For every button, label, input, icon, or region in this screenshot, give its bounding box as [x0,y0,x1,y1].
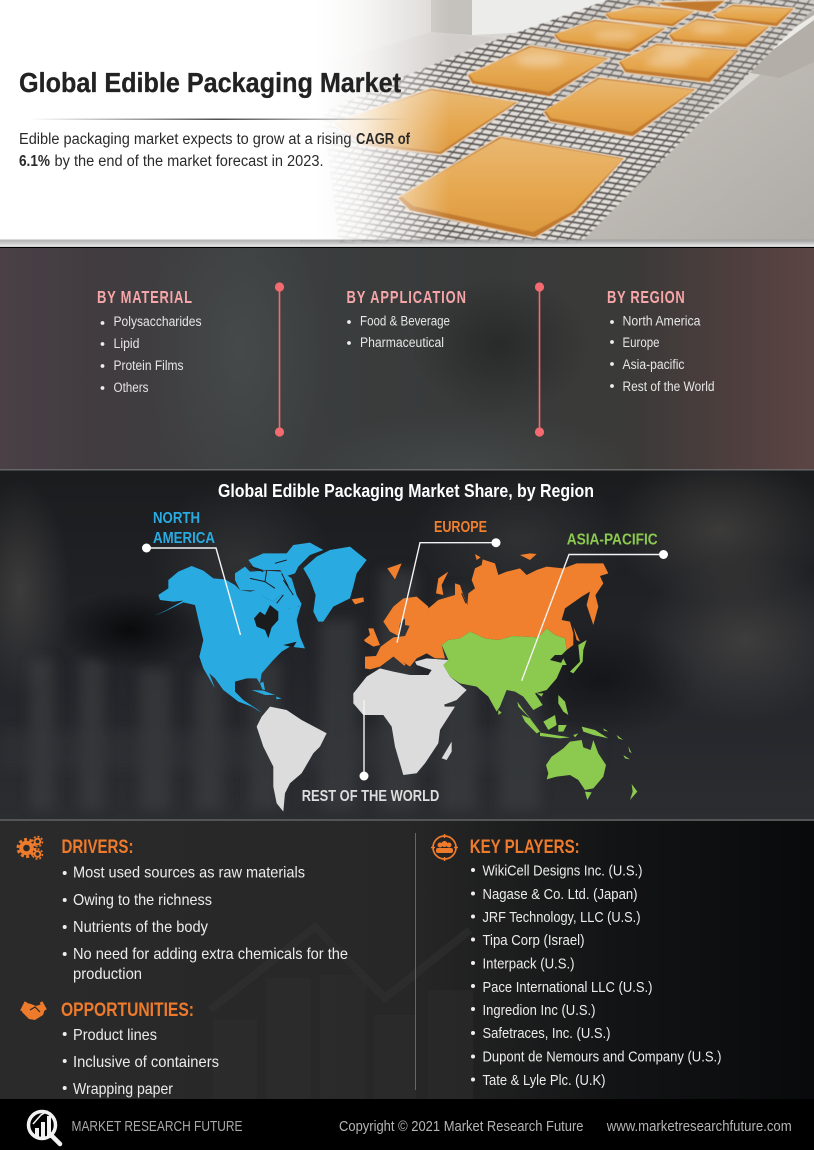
label: europe: EUROPE [434,519,487,536]
drivers list: Nutrients of the body [73,919,208,936]
key players list: Dupont de Nemours and Company (U.S.) [482,1048,722,1066]
column: by application [346,288,466,350]
label: asia-pacific: ASIA-PACIFIC [567,532,658,548]
label: north america: NORTH [153,510,200,527]
icon: target people [431,834,458,861]
map: rest of the world [257,658,467,812]
column: by region: Rest of the World [622,379,714,394]
key players list: JRF Technology, LLC (U.S.) [482,909,640,926]
intro text: Edible packaging market expects to grow at a rising [19,131,352,148]
key players list: Ingredion Inc (U.S.) [482,1002,596,1019]
icon: logo [28,1111,60,1144]
packet walls [332,0,795,238]
conveyor photo [300,0,814,244]
drivers list: production [73,966,142,983]
key players list: Safetraces, Inc. (U.S.) [482,1025,611,1042]
panel: segmentation [0,248,814,470]
drivers list: Owing to the richness [73,892,212,909]
footer website: www.marketresearchfuture.com [606,1119,792,1135]
map heading: Global Edible Packaging Market Share, by Region [218,481,594,501]
opportunities heading: OPPORTUNITIES: [61,1000,194,1021]
key players list: Tipa Corp (Israel) [482,932,585,949]
intro text: by the end of the market forecast in 2023. [54,153,324,170]
packet tops [335,6,792,232]
key players list: Pace International LLC (U.S.) [482,979,652,996]
column: by material: Protein Films [114,358,184,373]
panel: header photo banner [0,0,814,248]
intro text [19,131,411,170]
column: by region: BY REGION [607,288,685,308]
key players list: Interpack (U.S.) [482,956,575,972]
panel: footer [0,1099,814,1150]
label: north america: AMERICA [153,530,215,547]
opportunities list: Inclusive of containers [73,1054,219,1071]
column: by material [97,288,202,395]
icon: handshake [22,1002,46,1020]
map: europe and russia [352,553,608,669]
column: by application: Pharmaceutical [360,335,444,350]
column: by application: BY APPLICATION [346,288,466,308]
packet highlights [516,26,728,68]
footer brand: MARKET RESEARCH FUTURE [72,1119,243,1135]
label: north america [142,510,240,635]
column: by region: North America [622,314,701,328]
drivers heading: DRIVERS: [62,837,134,858]
column: by material: BY MATERIAL [97,288,192,308]
label: europe [397,519,500,643]
column: by material: Others [114,380,149,395]
column: by region: Asia-pacific [622,357,685,372]
icon: gears [18,836,42,859]
panel: market share map [0,455,814,821]
opportunities list: Product lines [73,1027,157,1044]
key players list: Nagase & Co. Ltd. (Japan) [482,886,638,903]
footer copyright: Copyright © 2021 Market Research Future [339,1119,584,1135]
opportunities list [63,1027,219,1098]
key players list: Tate & Lyle Plc. (U.K) [482,1072,606,1089]
divider [275,282,284,437]
intro text: CAGR of [356,131,411,148]
column: by region [607,288,714,394]
drivers list: No need for adding extra chemicals for the [73,946,348,963]
map: asia pacific [442,628,637,800]
key players list: WikiCell Designs Inc. (U.S.) [482,863,642,880]
title: Global Edible Packaging Market [19,67,401,98]
label: rest of the world: REST OF THE WORLD [302,788,439,805]
drivers list [63,864,348,983]
column: by region: Europe [622,335,660,350]
label: rest of the world [302,700,439,805]
food packets [332,0,795,238]
panel: drivers, opportunities, key players [0,821,814,1099]
column: by material: Lipid [114,336,140,351]
divider [535,282,544,437]
column: by material: Polysaccharides [114,314,202,329]
map: north america [154,543,367,713]
column: by application: Food & Beverage [360,314,450,328]
key players heading: KEY PLAYERS: [470,837,580,858]
opportunities list: Wrapping paper [73,1081,174,1098]
drivers list: Most used sources as raw materials [73,864,305,882]
label: asia-pacific [522,532,668,681]
key players list [471,863,722,1089]
intro text: 6.1% [19,153,50,170]
